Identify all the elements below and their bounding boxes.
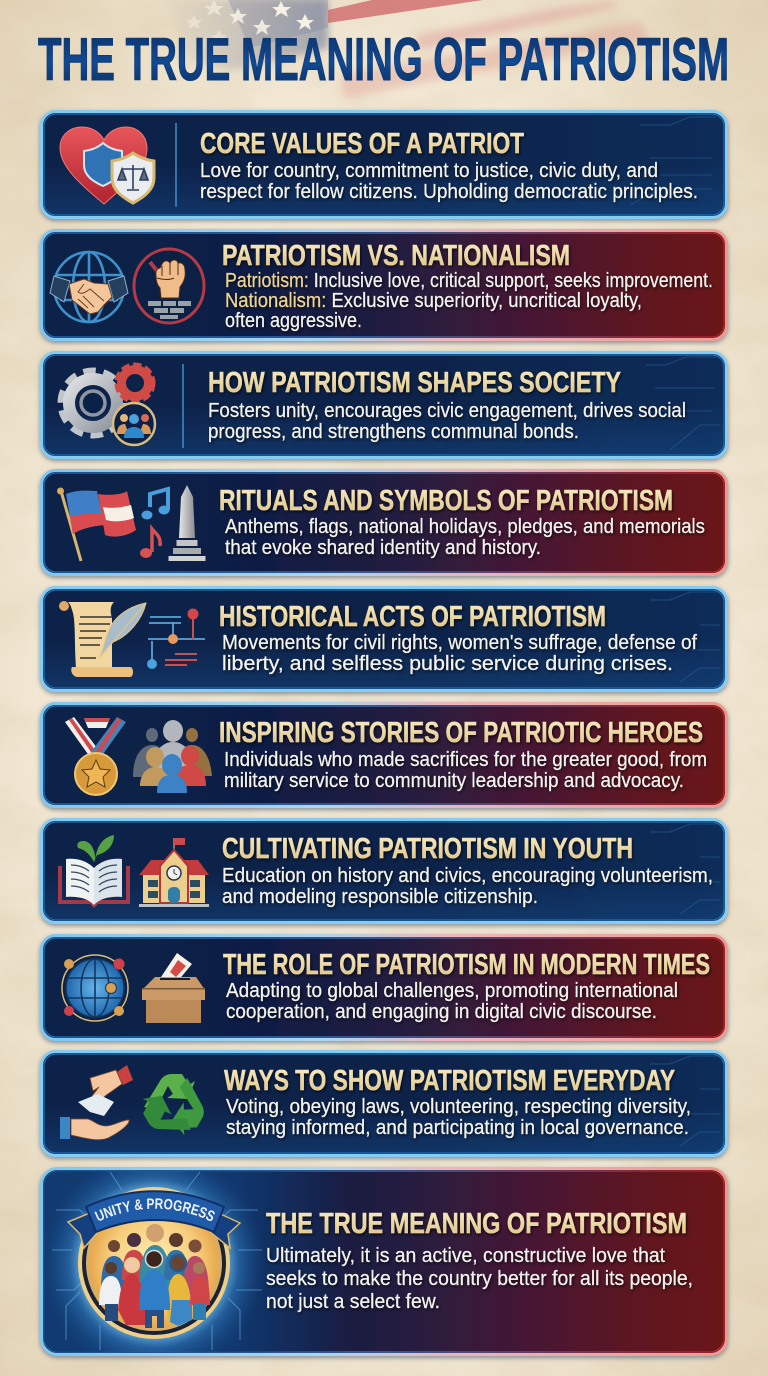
body text: and modeling responsible citizenship.: [222, 885, 538, 908]
body text: often aggressive.: [225, 309, 362, 332]
icon: flag: [57, 488, 136, 561]
ribbon banner: [66, 1190, 242, 1250]
heading: PATRIOTISM VS. NATIONALISM: [222, 240, 570, 272]
icon: timeline diagram: [147, 608, 205, 669]
icon: unity and progress badge: [44, 1171, 328, 1352]
body text: Fosters unity, encourages civic engagement, drives social: [208, 399, 686, 422]
icon: medal: [65, 717, 126, 795]
faded flag behind the title: [160, 0, 650, 98]
panel: the true meaning of patriotism: [37, 1166, 731, 1361]
body text: [225, 515, 705, 559]
panel: rituals and symbols: [42, 470, 726, 574]
ribbon banner: UNITY & PROGRESS: [94, 1198, 215, 1221]
panel: cultivating patriotism in youth: [42, 820, 726, 922]
icon: heart with shields: [60, 127, 154, 204]
icon: open book with sprout: [58, 835, 130, 908]
body text: [226, 979, 678, 1023]
body text: respect for fellow citizens. Upholding democratic principles.: [200, 180, 698, 203]
body text: Patriotism: Inclusive love, critical support, seeks improvement.: [225, 269, 713, 292]
panel: core values of a patriot: [42, 112, 726, 218]
body text: Movements for civil rights, women's suffrage, defense of: [222, 631, 697, 654]
body text: [225, 269, 713, 332]
body text: [208, 399, 686, 443]
body text: [200, 159, 698, 203]
heading: HISTORICAL ACTS OF PATRIOTISM: [219, 601, 606, 633]
body text: Nationalism: Exclusive superiority, uncritical loyalty,: [225, 289, 642, 312]
figures: community group: [99, 1224, 210, 1328]
icon: globe with handshake: [50, 252, 128, 322]
body text: Education on history and civics, encouraging volunteerism,: [222, 864, 713, 887]
body text: [224, 748, 707, 792]
panel: ways to show patriotism everyday: [42, 1052, 726, 1156]
body text: progress, and strengthens communal bonds.: [208, 420, 579, 443]
icon: group of people: [133, 720, 212, 793]
body text: seeks to make the country better for all its people,: [266, 1267, 693, 1290]
body text: Anthems, flags, national holidays, pledges, and memorials: [225, 515, 705, 538]
panel: patriotism vs nationalism: [42, 230, 726, 340]
heading: HOW PATRIOTISM SHAPES SOCIETY: [208, 367, 621, 399]
divider: [175, 123, 177, 207]
body text: Love for country, commitment to justice, civic duty, and: [200, 159, 658, 182]
body text: cooperation, and engaging in digital civic discourse.: [226, 1000, 657, 1023]
body text: Voting, obeying laws, volunteering, respecting diversity,: [226, 1095, 691, 1118]
icon: gears and community: [62, 366, 155, 445]
icon: recycling arrows: [137, 1074, 216, 1146]
body text: liberty, and selfless public service during crises.: [222, 652, 673, 675]
icon: connected globe: [62, 955, 128, 1021]
body text: Ultimately, it is an active, constructive love that: [266, 1244, 665, 1267]
panel: historical acts: [42, 588, 726, 690]
body text: staying informed, and participating in local governance.: [226, 1116, 689, 1139]
icon: school building: [139, 838, 209, 907]
body text: [222, 631, 697, 675]
body text: military service to community leadership and advocacy.: [224, 769, 684, 792]
icon: music notes: [140, 489, 170, 558]
heading: CORE VALUES OF A PATRIOT: [200, 128, 524, 160]
icon: crossed-out fist: [134, 249, 204, 323]
divider: [182, 364, 184, 448]
icon: obelisk monument: [168, 485, 206, 561]
body text: [222, 864, 713, 908]
icon: hands with ballot: [60, 1065, 133, 1140]
body text: that evoke shared identity and history.: [225, 536, 541, 559]
body text: Adapting to global challenges, promoting international: [226, 979, 678, 1002]
panel: inspiring stories: [42, 704, 726, 806]
icon: scroll and quill: [59, 601, 146, 677]
body text: not just a select few.: [266, 1290, 440, 1313]
heading: CULTIVATING PATRIOTISM IN YOUTH: [222, 833, 633, 865]
icon: ballot box: [142, 953, 205, 1023]
body text: [226, 1095, 691, 1139]
body text: Individuals who made sacrifices for the greater good, from: [224, 748, 707, 771]
panel: how patriotism shapes society: [42, 352, 726, 458]
panel: modern times: [42, 936, 726, 1040]
body text: [266, 1244, 693, 1313]
